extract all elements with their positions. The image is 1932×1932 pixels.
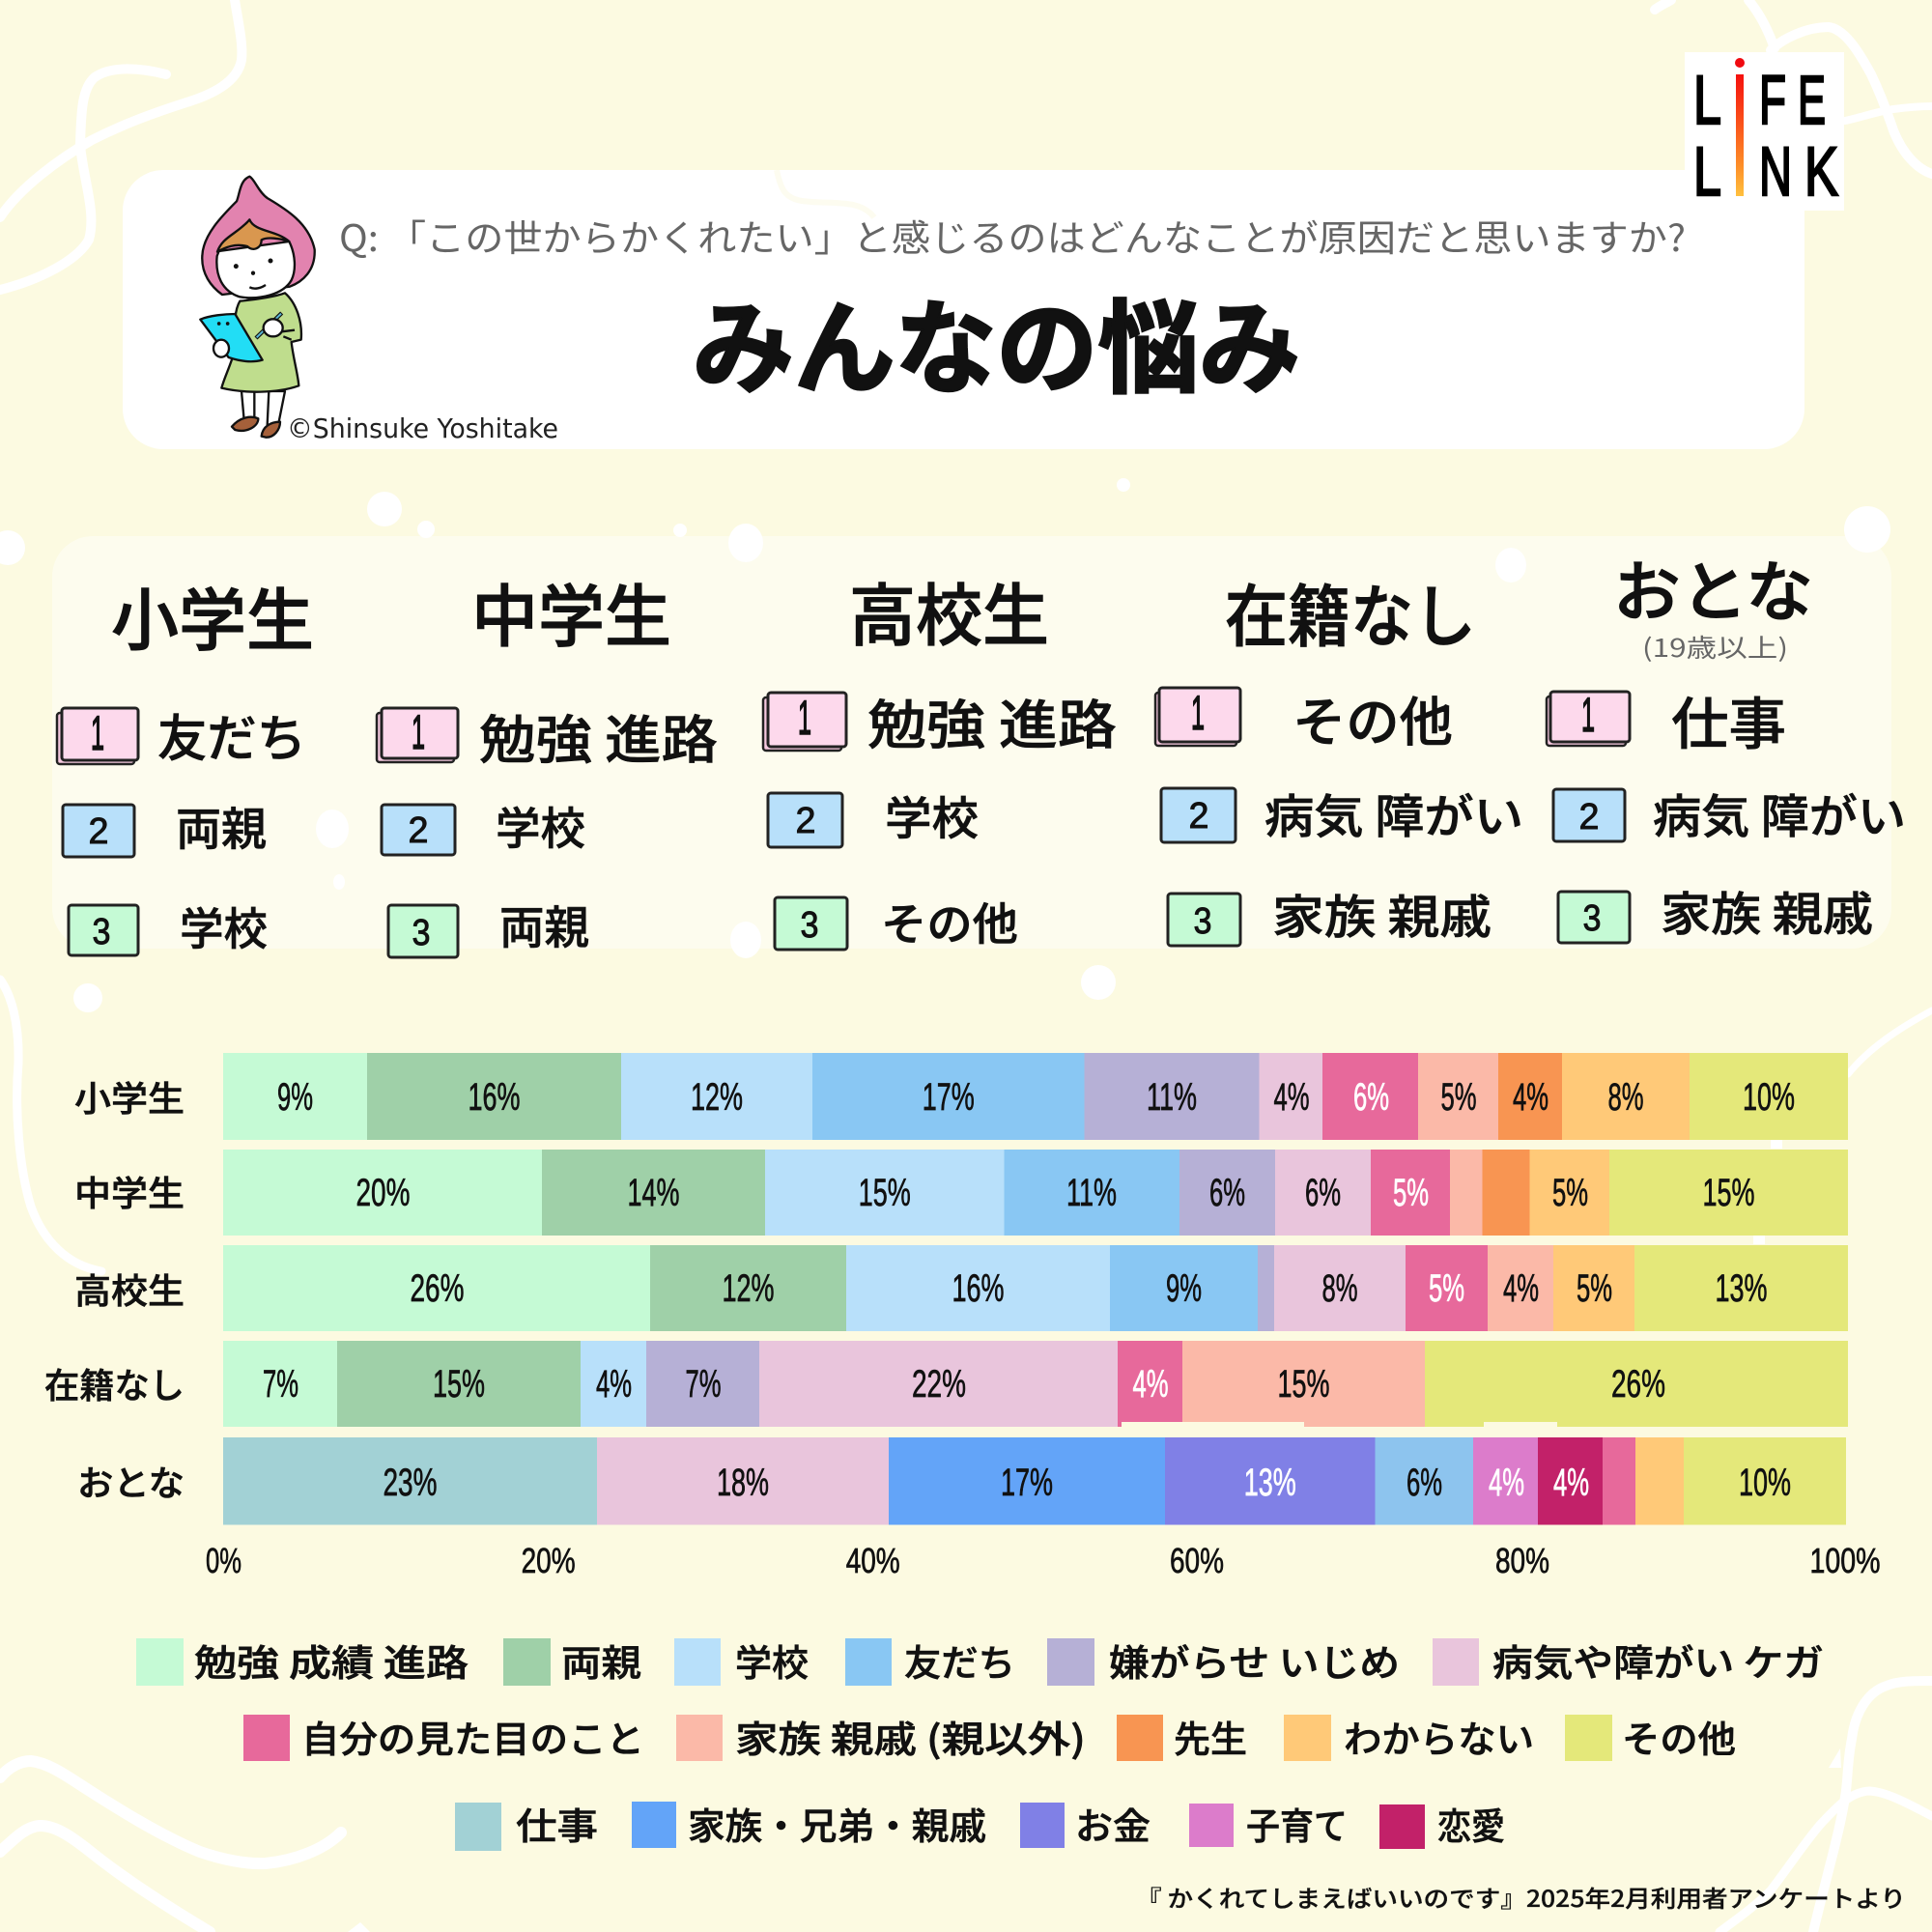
x axis (206, 1541, 1880, 1580)
legend: その他 (1622, 1710, 1736, 1763)
x axis: 80% (1495, 1541, 1549, 1580)
logo: LIFE LINK: K (1804, 134, 1838, 211)
row: not enrolled: 7% (686, 1363, 721, 1406)
row: junior high school: 11% (1066, 1172, 1117, 1214)
row: elementary school: 6% (1353, 1076, 1389, 1119)
legend: 勉強 成績 進路 (194, 1634, 469, 1687)
column: adults: 2 (1578, 797, 1600, 838)
row: not enrolled: 15% (1277, 1363, 1329, 1406)
column: elementary school: 3 (93, 912, 110, 952)
row: elementary school: 16% (468, 1076, 520, 1119)
column: elementary school: 両親 (176, 792, 267, 859)
row: adults: 6% (1406, 1462, 1442, 1504)
title: みんなの悩み (693, 268, 1300, 414)
row: adults: 13% (1244, 1462, 1296, 1504)
column: high school: 勉強 進路 (867, 682, 1117, 759)
legend: お金 (1075, 1797, 1151, 1850)
row: not enrolled: 22% (912, 1363, 966, 1406)
legend: わからない (1344, 1710, 1534, 1763)
row: elementary school: 小学生 (74, 1071, 185, 1122)
column: not enrolled: 1 (1191, 686, 1205, 740)
row: adults: 23% (383, 1462, 437, 1504)
chart: stacked bars (44, 1053, 1880, 1580)
column: not enrolled: その他 (1293, 679, 1453, 756)
column: junior high school: 中学生 (471, 563, 671, 661)
row: high school: 高校生 (74, 1264, 185, 1314)
row: junior high school: 14% (628, 1172, 680, 1214)
column: junior high school: 2 (408, 810, 429, 851)
column: adults: おとな (1613, 539, 1813, 635)
x axis: 100% (1810, 1541, 1880, 1580)
row: not enrolled (44, 1341, 1848, 1428)
row: high school: 4% (1503, 1267, 1539, 1310)
column: not enrolled: 在籍なし (1225, 563, 1476, 661)
row: adults: 18% (717, 1462, 769, 1504)
row: junior high school: 15% (1702, 1172, 1754, 1214)
legend: 恋愛 (1437, 1797, 1505, 1850)
row: high school: 5% (1429, 1267, 1464, 1310)
row: adults: おとな (77, 1456, 185, 1506)
credit: ©Shinsuke Yoshitake (287, 412, 558, 444)
logo: LIFE LINK: N (1759, 134, 1792, 211)
column: junior high school: 3 (412, 913, 431, 953)
row: adults (77, 1437, 1846, 1524)
column: elementary school: 2 (89, 811, 108, 852)
column: adults: 病気 障がい (1653, 779, 1906, 846)
column: adults: (19歳以上) (1642, 629, 1788, 665)
column: adults: 3 (1582, 898, 1602, 939)
row: not enrolled: 26% (1611, 1363, 1665, 1406)
legend: 嫌がらせ いじめ (1109, 1634, 1400, 1687)
logo: LIFE LINK: L (1693, 134, 1721, 211)
panel: header (123, 170, 1804, 449)
column: junior high school: 1 (412, 705, 425, 759)
logo: LIFE LINK: F (1759, 63, 1786, 139)
row: high school (74, 1245, 1848, 1331)
column: high school (763, 562, 1117, 953)
row: junior high school: 中学生 (74, 1166, 185, 1216)
logo: LIFE LINK: L (1693, 63, 1721, 139)
x axis: 60% (1170, 1541, 1224, 1580)
column: high school: 学校 (885, 781, 979, 848)
row: elementary school (74, 1053, 1848, 1140)
x axis: 0% (206, 1541, 242, 1580)
column: not enrolled: 2 (1188, 796, 1209, 837)
source note: 『 かくれてしまえばいいのです』2025年2月利用者アンケートより (1136, 1880, 1906, 1914)
row: high school: 8% (1321, 1267, 1358, 1310)
row: high school: 5% (1577, 1267, 1612, 1310)
column: not enrolled: 3 (1194, 901, 1211, 942)
row: adults: 4% (1489, 1462, 1524, 1504)
row: elementary school: 10% (1743, 1076, 1795, 1119)
column: adults (1547, 539, 1906, 944)
column: not enrolled: 家族 親戚 (1272, 879, 1492, 947)
column: high school: 1 (798, 691, 811, 745)
legend: 病気や障がい ケガ (1492, 1634, 1824, 1687)
row: not enrolled: 在籍なし (44, 1358, 185, 1408)
logo: LIFE LINK (1685, 52, 1844, 211)
row: elementary school: 8% (1607, 1076, 1644, 1119)
row: adults: 17% (1001, 1462, 1053, 1504)
legend: 自分の見た目のこと (301, 1710, 644, 1763)
column: high school: 3 (800, 905, 819, 946)
column: junior high school: 学校 (496, 794, 585, 858)
legend: 仕事 (516, 1797, 598, 1850)
row: high school: 9% (1166, 1267, 1202, 1310)
legend: 学校 (735, 1634, 809, 1687)
row: not enrolled: 4% (1132, 1363, 1169, 1406)
column: not enrolled: 病気 障がい (1264, 779, 1523, 846)
row: adults: 4% (1553, 1462, 1589, 1504)
panel: top three ranking (52, 536, 1906, 958)
column: adults: 家族 親戚 (1661, 876, 1873, 944)
column: high school: 2 (796, 801, 815, 841)
row: elementary school: 5% (1441, 1076, 1476, 1119)
row: elementary school: 9% (277, 1076, 313, 1119)
legend: 友だち (904, 1634, 1015, 1687)
row: not enrolled: 7% (263, 1363, 298, 1406)
column: junior high school: 勉強 進路 (479, 697, 718, 774)
x axis: 40% (846, 1541, 900, 1580)
column: not enrolled (1155, 563, 1523, 947)
row: elementary school: 4% (1273, 1076, 1310, 1119)
row: elementary school: 17% (923, 1076, 975, 1119)
column: high school: その他 (881, 890, 1018, 953)
row: elementary school: 4% (1513, 1076, 1548, 1119)
legend: 家族 親戚 (親以外) (735, 1710, 1086, 1763)
legend: 家族・兄弟・親戚 (688, 1797, 986, 1850)
column: adults: 1 (1581, 688, 1595, 742)
row: adults: 10% (1739, 1462, 1791, 1504)
row: elementary school: 11% (1147, 1076, 1197, 1119)
column: junior high school: 両親 (499, 891, 589, 957)
legend: 先生 (1174, 1710, 1247, 1763)
row: junior high school: 15% (859, 1172, 911, 1214)
row: high school: 12% (723, 1267, 775, 1310)
column: elementary school: 1 (91, 706, 104, 760)
row: not enrolled: 4% (596, 1363, 632, 1406)
column: elementary school: 学校 (180, 895, 268, 958)
row: junior high school (74, 1150, 1848, 1236)
logo: LIFE LINK: E (1798, 63, 1826, 139)
row: junior high school: 6% (1209, 1172, 1245, 1214)
column: elementary school: 友だち (157, 698, 306, 771)
row: junior high school: 5% (1552, 1172, 1588, 1214)
row: elementary school: 12% (691, 1076, 743, 1119)
row: junior high school: 20% (355, 1172, 410, 1214)
legend (136, 1634, 1824, 1851)
column: high school: 高校生 (849, 562, 1049, 660)
row: high school: 13% (1716, 1267, 1768, 1310)
row: high school: 16% (952, 1267, 1005, 1310)
column: adults: 仕事 (1671, 679, 1786, 760)
row: not enrolled: 15% (433, 1363, 485, 1406)
row: high school: 26% (410, 1267, 464, 1310)
column: junior high school (377, 563, 718, 957)
icon: character with tablet (200, 177, 315, 438)
question text: Q: 「この世からかくれたい」と感じるのはどんなことが原因だと思いますか? (339, 209, 1686, 262)
legend: 子育て (1246, 1797, 1348, 1850)
row: junior high school: 6% (1305, 1172, 1341, 1214)
legend: 両親 (561, 1634, 641, 1687)
column: elementary school (57, 567, 314, 958)
x axis: 20% (522, 1541, 576, 1580)
row: junior high school: 5% (1393, 1172, 1429, 1214)
column: elementary school: 小学生 (111, 567, 314, 665)
